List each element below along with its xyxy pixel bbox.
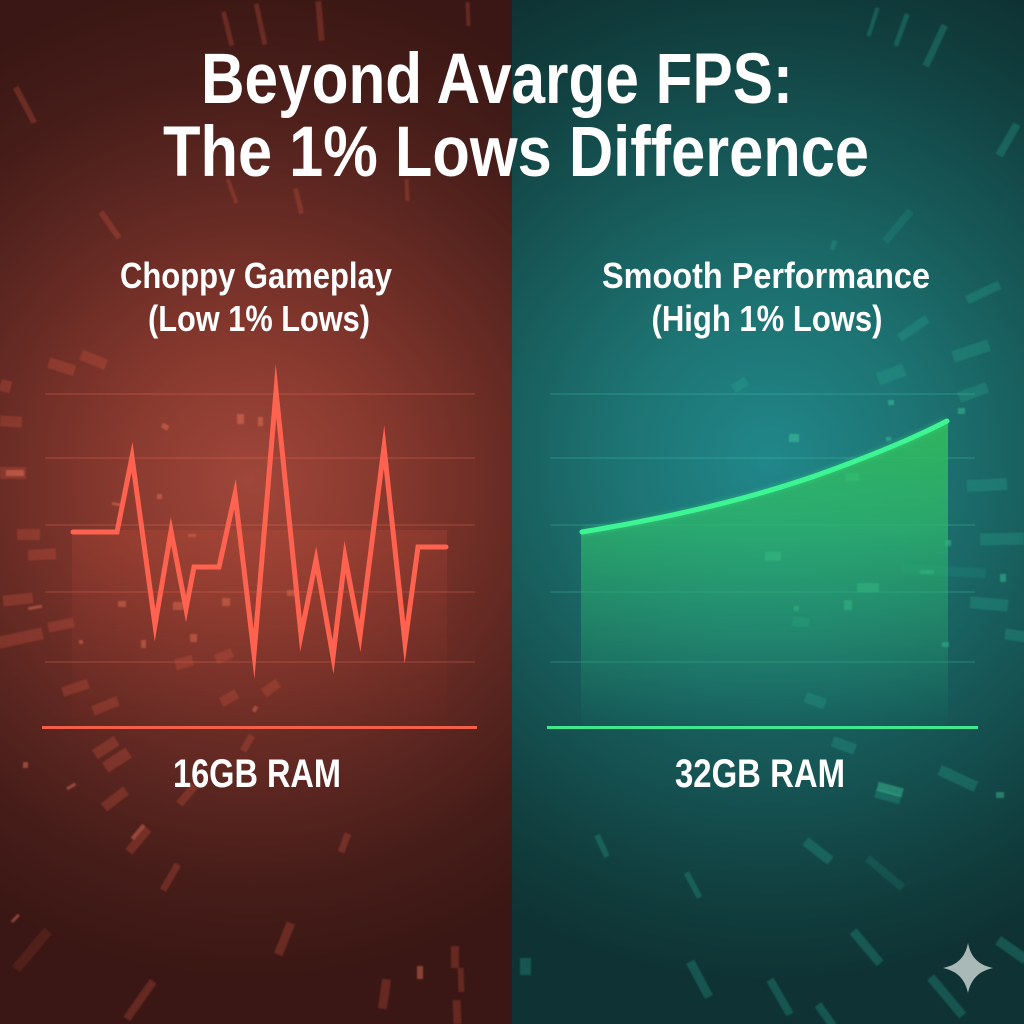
label: 32GB RAM: 32GB RAM bbox=[675, 752, 845, 796]
chart: smooth frame-rate area bbox=[581, 420, 948, 725]
title: Beyond Avarge FPS: bbox=[201, 40, 793, 119]
heading: choppy gameplay: (Low 1% Lows) bbox=[148, 298, 370, 339]
gridlines bbox=[45, 394, 975, 662]
decorative data streaks right bbox=[520, 7, 1024, 1024]
decorative data streaks left bbox=[0, 1, 470, 1024]
heading: choppy gameplay: Choppy Gameplay bbox=[120, 255, 392, 296]
panel: left red background bbox=[0, 0, 512, 1024]
panel: right teal background bbox=[512, 0, 1024, 1024]
heading: choppy gameplay bbox=[120, 255, 392, 339]
label: 16GB RAM: 16GB RAM bbox=[173, 752, 341, 796]
heading: smooth performance: Smooth Performance bbox=[602, 255, 930, 296]
heading: smooth performance bbox=[602, 255, 930, 339]
baseline: right axis bbox=[547, 726, 978, 729]
chart: choppy frame-rate line bbox=[72, 391, 447, 725]
heading: smooth performance: (High 1% Lows) bbox=[652, 298, 882, 339]
decorative bright flecks right bbox=[765, 400, 1006, 798]
decorative bright flecks left bbox=[6, 414, 423, 979]
title: The 1% Lows Difference bbox=[163, 113, 869, 192]
icon: sparkle watermark bbox=[943, 943, 993, 993]
baseline: left axis bbox=[42, 726, 477, 729]
title bbox=[163, 40, 869, 192]
